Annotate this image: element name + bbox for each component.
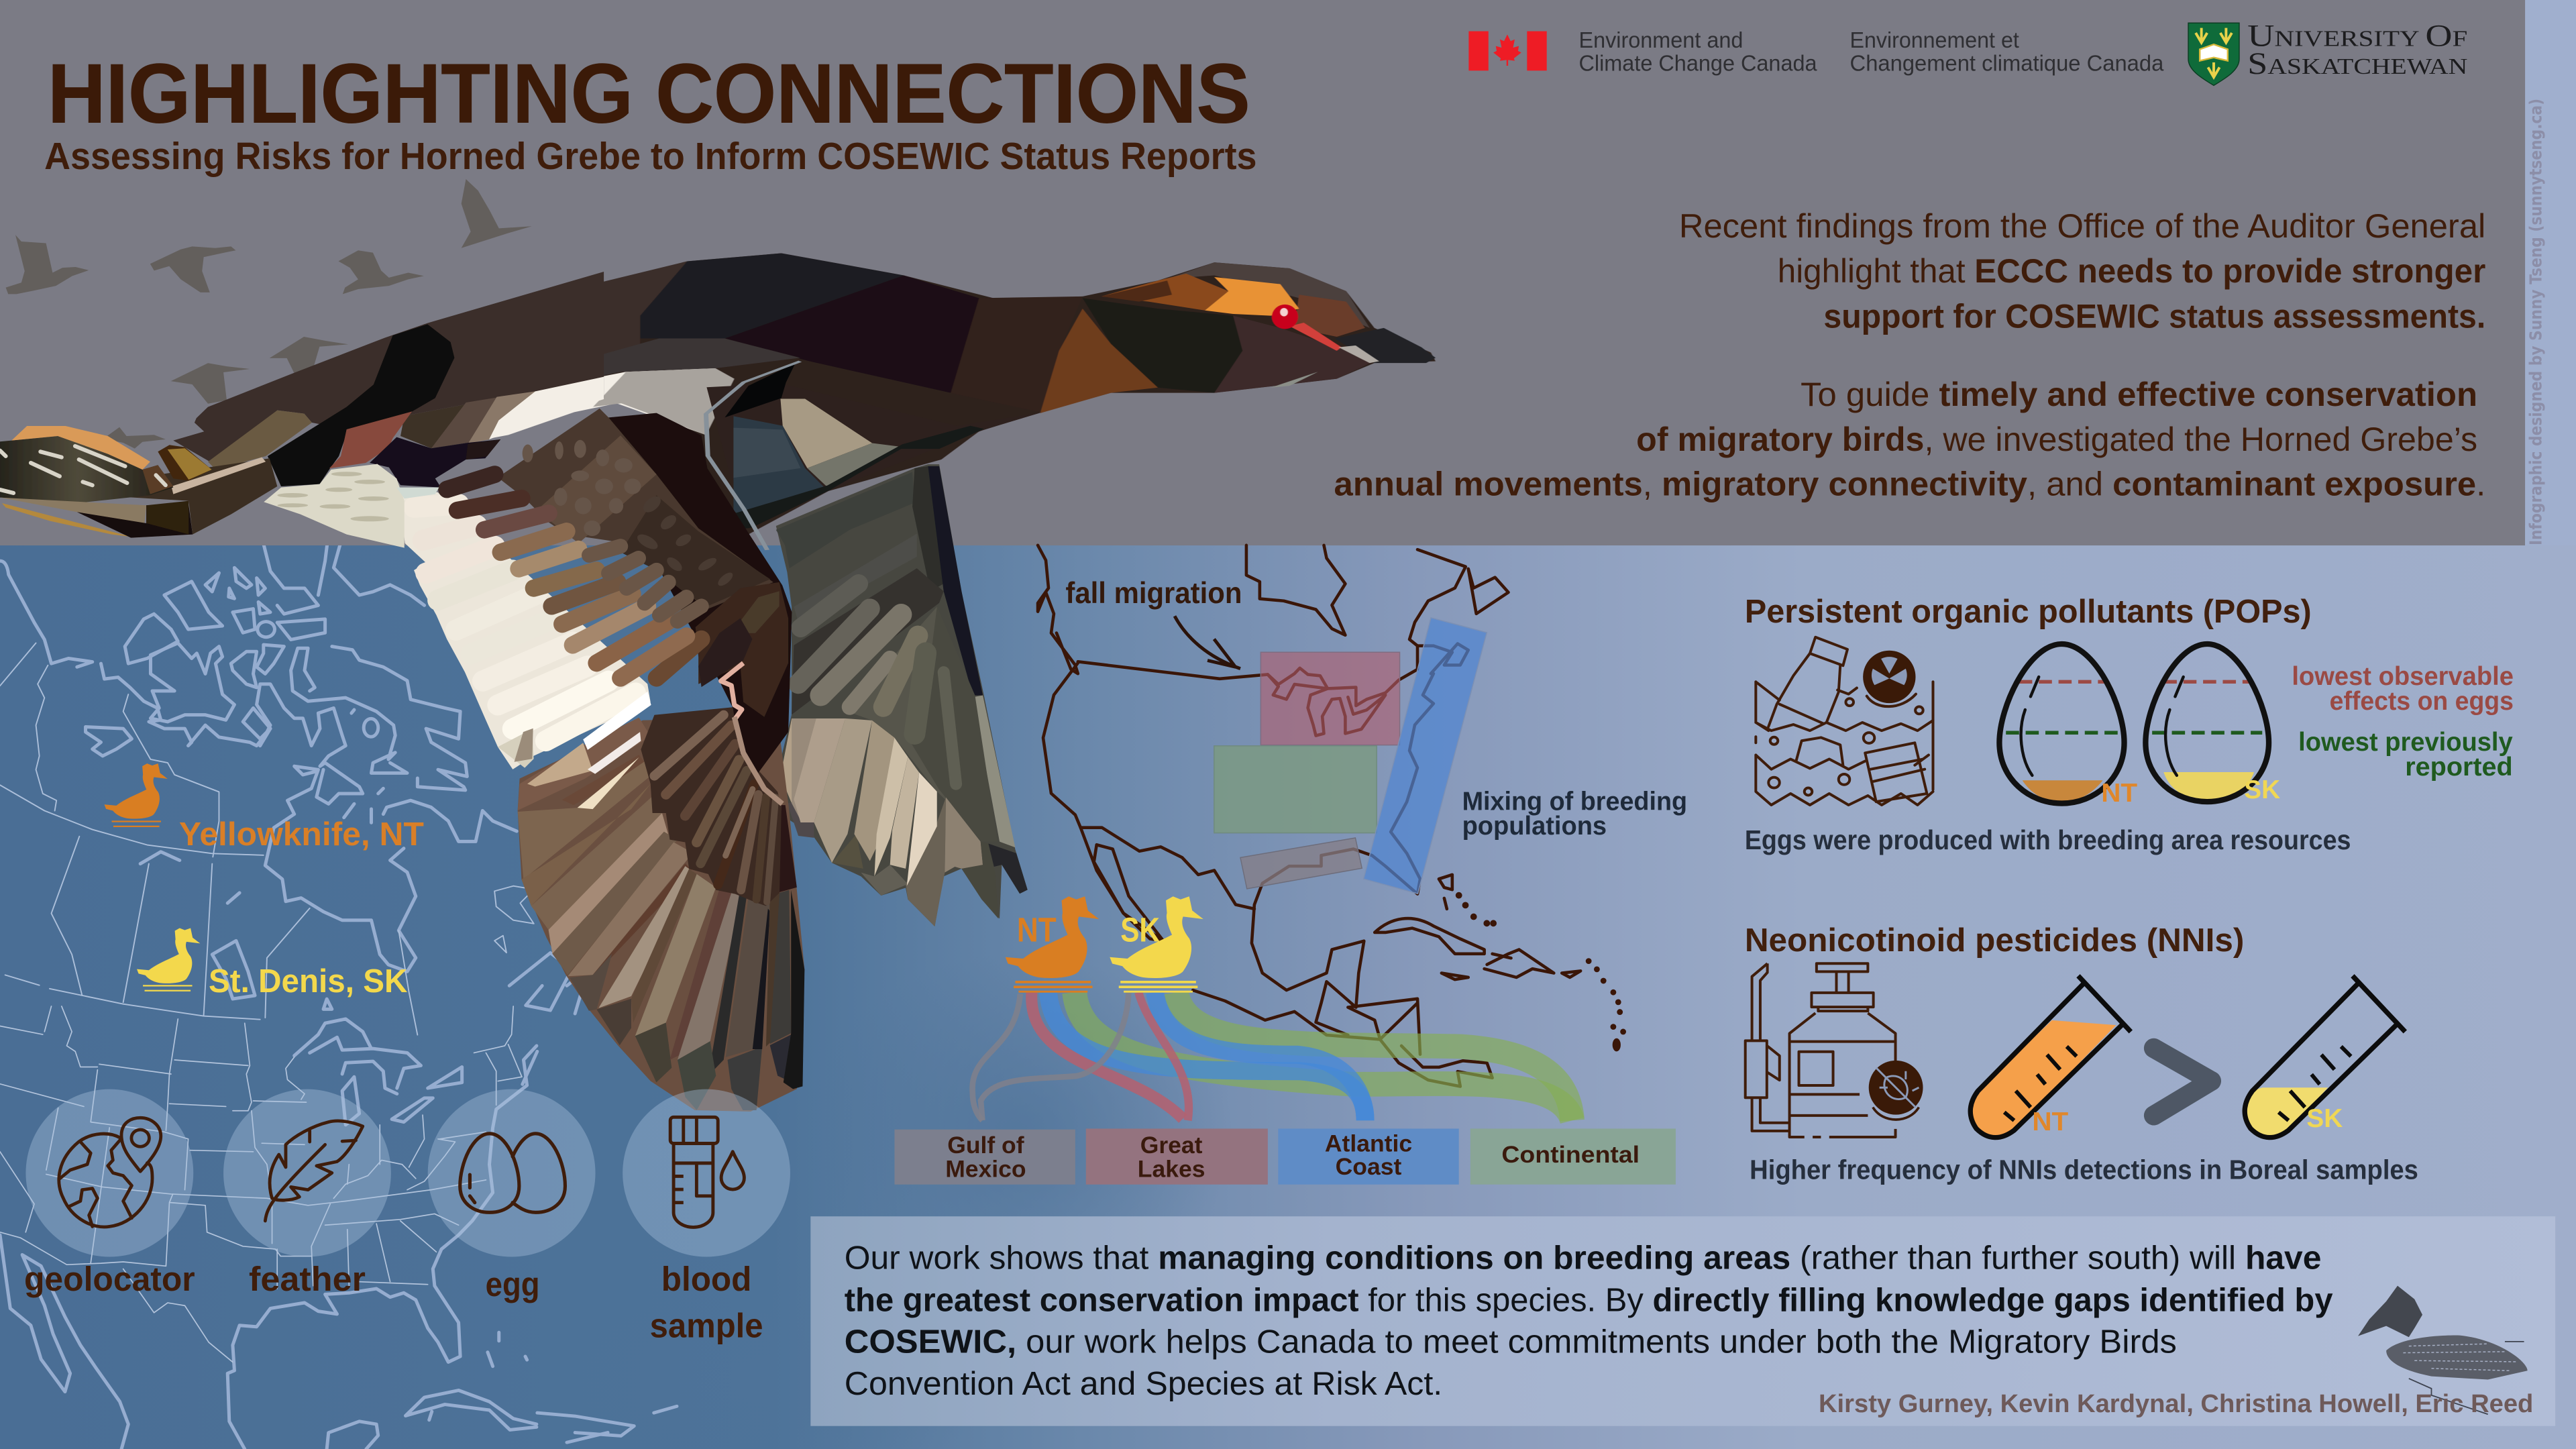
legend: lowest observable effects: lowest observable [2292, 662, 2514, 691]
connectivity region: Atlantic Coast box [1364, 618, 1487, 894]
body and neck [423, 254, 1436, 547]
caption: NNIs finding: Higher frequency of NNIs detections in Boreal samples [1750, 1154, 2418, 1185]
heading: NNIs: Neonicotinoid pesticides (NNIs) [1745, 922, 2244, 959]
annotation: mixing of breeding populations [1462, 787, 1687, 841]
tail and foot [0, 426, 277, 538]
conclusion panel [810, 1216, 2555, 1426]
sample type: blood sample: blood [661, 1259, 751, 1298]
legend: lowest previously reported [2298, 728, 2513, 782]
legend: Atlantic Coast [1278, 1128, 1459, 1185]
intro paragraph: study aims: of migratory birds, we investigated the Horned Grebe’s [1636, 421, 2477, 458]
right credit strip: Infographic designed by Sunny Tseng (sunnytseng.ca) [2526, 99, 2546, 545]
large SK grebe: SK [1120, 910, 1160, 949]
intro paragraph: study aims: annual movements , migratory connectivity , and contaminant exposure . [1334, 465, 2485, 502]
lower background panel [0, 526, 2576, 1449]
right credit strip [2525, 0, 2576, 545]
legend: Great Lakes: Lakes [1138, 1156, 1205, 1183]
chart: NT test tube [1970, 976, 2131, 1138]
conclusion panel: Our work shows that managing conditions on breeding areas (rather than further south) will have [845, 1240, 2321, 1277]
sample type: geolocator: geolocator [24, 1259, 195, 1298]
annotation: mixing of breeding populations: populations [1462, 812, 1607, 841]
near wing: inner primary coverts [641, 707, 782, 906]
annotation: fall migration with arrow: fall migration [1065, 577, 1242, 610]
legend: lowest previously reported: lowest previously [2298, 728, 2513, 757]
logo: Environment and Climate Change Canada: Environnement et [1850, 28, 2019, 53]
sample type: egg: egg [486, 1265, 539, 1303]
logo: University of Saskatchewan [2188, 19, 2467, 85]
logo: University of Saskatchewan: U NIVERSITY O F [2247, 19, 2467, 54]
legend: Gulf of Mexico: Gulf of [947, 1132, 1024, 1159]
intro paragraph: study aims: To guide timely and effective conservation [1801, 376, 2477, 413]
near wing: white secondaries [399, 489, 651, 769]
sample type: egg [428, 1089, 596, 1303]
legend: Gulf of Mexico [894, 1130, 1075, 1185]
migration map: dotted island chains [1456, 892, 1626, 1051]
top grey title panel [0, 0, 2525, 545]
label: Yellowknife site with orange grebe: Yellowknife, NT [179, 816, 424, 853]
chart: NT test tube: NT [2032, 1108, 2068, 1136]
sample type: feather [223, 1089, 391, 1298]
caption: POPs finding: Eggs were produced with breeding area resources [1745, 824, 2351, 855]
sample type: blood sample [623, 1089, 790, 1344]
authors: Kirsty Gurney, Kevin Kardynal, Christina Howell, Eric Reed [1819, 1390, 2533, 1418]
large NT grebe [1006, 896, 1099, 993]
legend: lowest observable effects: effects on eggs [2330, 687, 2514, 716]
annotation: mixing of breeding populations: Mixing of breeding [1462, 787, 1687, 816]
legend: Great Lakes: Great [1140, 1132, 1203, 1159]
label: St. Denis site with yellow grebe: St. Denis, SK [209, 963, 407, 1000]
near wing: brown coverts and shoulder [447, 409, 792, 804]
logo: University of Saskatchewan: S ASKATCHEWAN [2247, 47, 2467, 81]
intro paragraph: study aims [1334, 376, 2485, 502]
legend: lowest observable effects [2292, 662, 2514, 716]
subtitle: Assessing Risks for Horned Grebe to Inform COSEWIC Status Reports [44, 135, 1256, 177]
conclusion panel: Convention Act and Species at Risk Act. [845, 1366, 1442, 1402]
conclusion panel: the greatest conservation impact for this species. By directly filling knowledge gaps identified by [845, 1282, 2333, 1318]
logo: Environment and Climate Change Canada: Environment and [1578, 28, 1743, 53]
background flock of geese [6, 179, 532, 449]
conclusion panel: COSEWIC, our work helps Canada to meet commitments under both the Migratory Birds [845, 1324, 2177, 1360]
basemap: Canadian provincial borders [0, 643, 534, 1035]
legend: Continental [1470, 1128, 1676, 1185]
connectivity region: Great Lakes box [1260, 652, 1400, 745]
icon: pesticide sprayer [1746, 963, 1923, 1137]
intro paragraph: auditor general findings [1679, 207, 2485, 335]
title: HIGHLIGHTING CONNECTIONS [48, 47, 1250, 140]
legend: lowest previously reported: reported [2405, 753, 2513, 782]
legend: Atlantic Coast: Atlantic [1325, 1130, 1412, 1157]
large NT grebe: NT [1017, 910, 1057, 949]
illustration: small grebe sketch [2358, 1286, 2528, 1414]
near wing: primary feathers [518, 718, 804, 1112]
logo: Environment and Climate Change Canada [1468, 28, 2164, 76]
logo: Environment and Climate Change Canada: Climate Change Canada [1578, 51, 1817, 76]
sample type: blood sample: sample [650, 1305, 763, 1344]
basemap: Canada [0, 523, 517, 1009]
chart: NT egg contaminant level [1999, 644, 2137, 808]
intro paragraph: auditor general findings: highlight that ECCC needs to provide stronger [1778, 252, 2485, 290]
legend: Great Lakes [1086, 1128, 1268, 1185]
lower flank and wing coverts on body [706, 384, 1042, 530]
migratory connectivity ribbons [973, 992, 1572, 1120]
chart: SK test tube [2245, 976, 2405, 1138]
label: Yellowknife site with orange grebe [105, 763, 424, 853]
basemap: United States and Mexico [0, 1019, 537, 1449]
wing wedge and grey edge [706, 362, 800, 550]
icon: polluted water [1756, 637, 1933, 805]
legend: Gulf of Mexico: Mexico [945, 1156, 1026, 1183]
chart: SK test tube: SK [2306, 1104, 2343, 1133]
chart: NT egg contaminant level: NT [2101, 779, 2137, 808]
legend: Continental: Continental [1501, 1141, 1640, 1168]
heading: POPs: Persistent organic pollutants (POPs) [1745, 594, 2312, 630]
connectivity region: Continental box [1214, 746, 1377, 833]
intro paragraph: auditor general findings: support for COSEWIC status assessments. [1823, 298, 2485, 335]
logo: Environment and Climate Change Canada: Changement climatique Canada [1850, 51, 2164, 76]
basemap: US state borders [0, 1006, 522, 1362]
comparison: greater than [2154, 1048, 2211, 1116]
belly [264, 464, 439, 548]
label: St. Denis site with yellow grebe [137, 928, 407, 1000]
legend: Atlantic Coast: Coast [1336, 1153, 1401, 1180]
chart: SK egg contaminant level: SK [2244, 775, 2280, 804]
sample type: geolocator [24, 1089, 195, 1298]
annotation: fall migration with arrow [1065, 577, 1242, 669]
far wing [776, 464, 1028, 926]
connectivity region: Gulf of Mexico box [1240, 838, 1362, 889]
illustration: flying Horned Grebe [0, 254, 1436, 1112]
migration map: dark continent outline [1038, 545, 1580, 1087]
sample type: feather: feather [249, 1259, 366, 1298]
basemap: Atlantic Canada and Caribbean fragments [509, 953, 677, 1442]
intro paragraph: auditor general findings: Recent findings from the Office of the Auditor General [1679, 207, 2485, 245]
near wing: bright windows in primaries [583, 692, 651, 774]
large SK grebe [1110, 896, 1203, 993]
rear body, black flank, rufous patch [173, 272, 604, 488]
chart: SK egg contaminant level [2145, 644, 2280, 804]
